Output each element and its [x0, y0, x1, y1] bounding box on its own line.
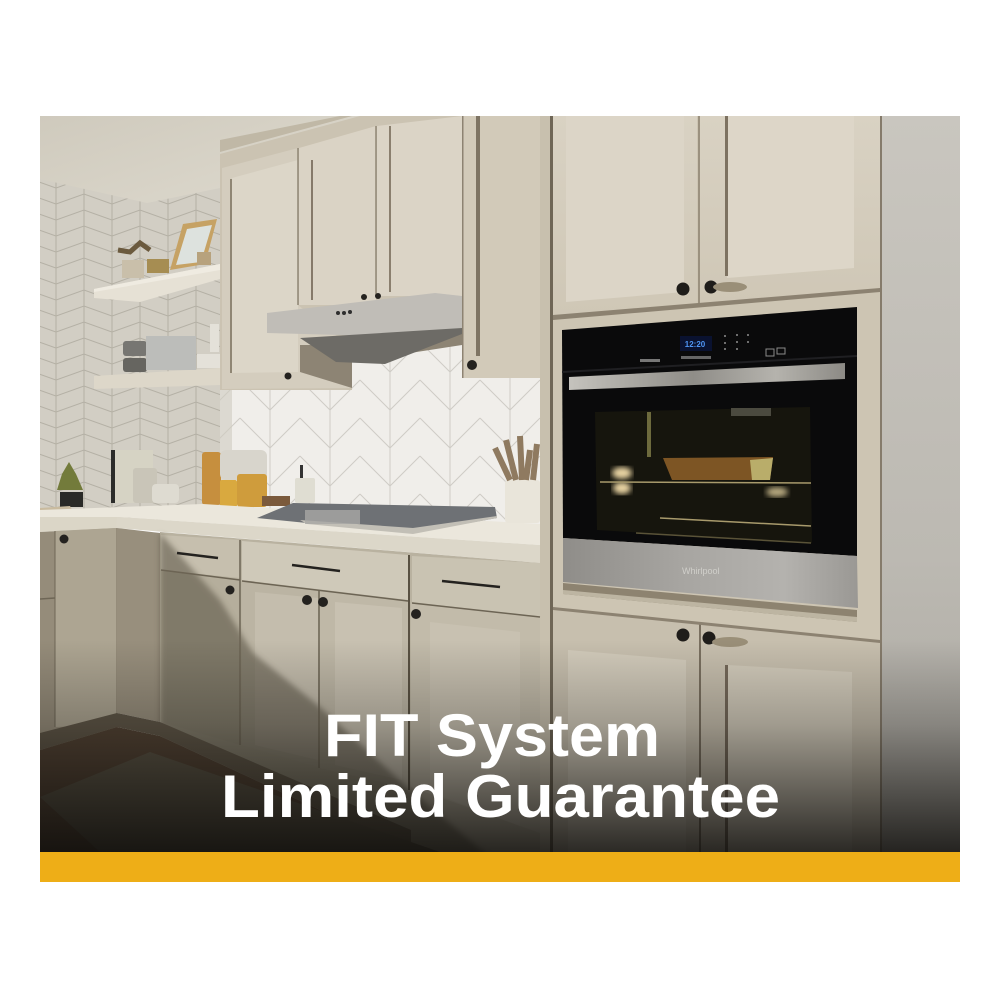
wall oven: Whirlpool [682, 566, 720, 576]
range hood [267, 293, 462, 388]
title: FIT System [324, 702, 660, 769]
steel lower panel [563, 538, 858, 608]
title [221, 702, 780, 830]
photo: kitchen [40, 116, 960, 900]
oven tower cabinets [553, 116, 882, 852]
dark gradient overlay [40, 640, 960, 852]
oven window [595, 407, 812, 543]
side wall [882, 116, 960, 852]
yellow band [40, 852, 960, 882]
oven handle [569, 363, 845, 390]
infographic scene [40, 116, 960, 882]
ceiling [40, 116, 360, 203]
shelves with items [94, 219, 220, 389]
floor and rug [40, 713, 440, 852]
counter items [40, 450, 315, 510]
upper cabinets [220, 116, 553, 852]
control panel display: 12:20 [685, 340, 706, 349]
countertop and cooktop [40, 436, 540, 563]
lower cabinets [40, 293, 540, 900]
title: Limited Guarantee [221, 763, 780, 830]
tiled back wall [40, 179, 540, 527]
control panel display [640, 334, 785, 362]
wall oven [562, 307, 858, 622]
